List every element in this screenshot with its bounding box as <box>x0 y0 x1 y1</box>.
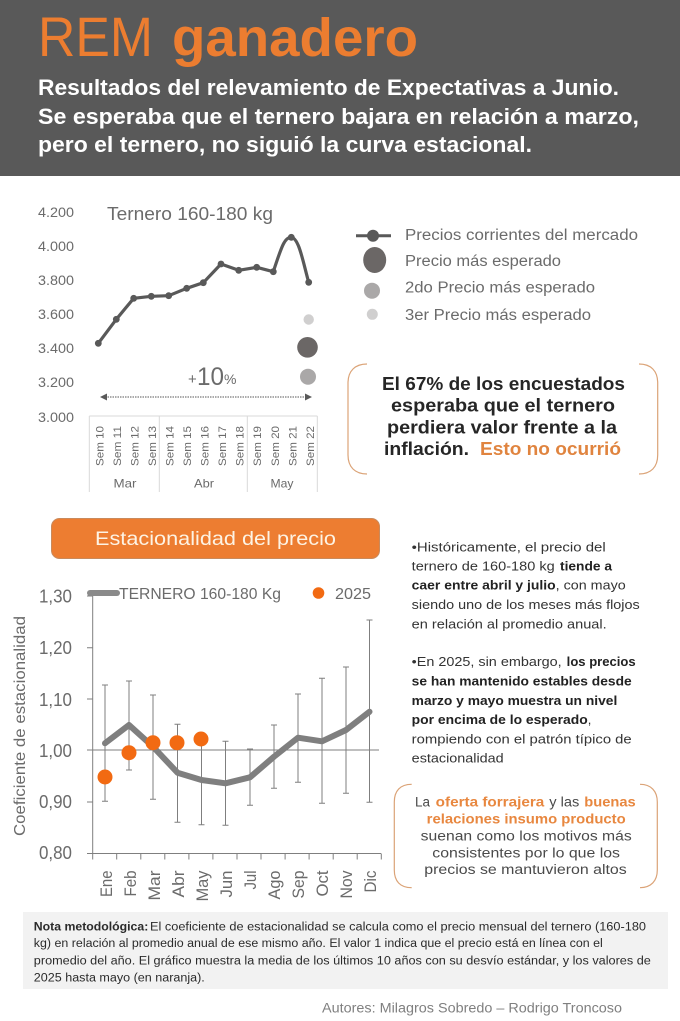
month labels: Dic <box>362 870 380 892</box>
month labels <box>98 870 380 902</box>
callout: reasons: consistentes por lo que los <box>432 845 620 860</box>
error bars <box>102 620 372 825</box>
month labels: Feb <box>122 870 140 896</box>
text block: historical pattern: tiende a <box>560 559 613 574</box>
header banner <box>0 0 680 176</box>
month labels: Mar <box>114 476 136 490</box>
text block: historical pattern: caer entre abril y julio <box>412 578 556 592</box>
y axis labels: 3.400 <box>38 340 74 356</box>
text block: 2025 behaviour: •En 2025, sin embargo, <box>412 654 562 669</box>
legend: market prices: Precios corrientes del mercado <box>405 227 638 244</box>
y axis labels: 1,00 <box>39 741 72 761</box>
text block: historical pattern: en relación al promedio anual. <box>412 616 607 631</box>
text block: 2025 behaviour: marzo y mayo muestra un nivel <box>412 693 617 708</box>
title: ganadero <box>172 8 418 68</box>
week labels: Sem 19 <box>252 426 264 466</box>
authors: Autores: Milagros Sobredo – Rodrigo Troncoso <box>322 1001 622 1016</box>
methodology note: kg) en relación al promedio anual de ese mismo año. El valor 1 indica que el precio está en línea con el <box>34 938 603 950</box>
week labels: Sem 13 <box>147 426 159 466</box>
y axis labels: 1,20 <box>39 638 72 658</box>
legend: second expected <box>364 279 595 299</box>
text block: 2025 behaviour <box>412 654 636 765</box>
change label: 10 <box>197 363 224 391</box>
y axis labels: 3.600 <box>38 306 74 322</box>
subtitle: Se esperaba que el ternero bajara en relación a marzo, <box>38 104 639 129</box>
week labels: Sem 12 <box>129 426 141 466</box>
y axis labels: 3.000 <box>38 409 74 425</box>
text block: 2025 behaviour: los precios <box>567 654 636 669</box>
callout: reasons: relaciones insumo producto <box>427 811 626 826</box>
callout: reasons: suenan como los motivos más <box>421 829 632 844</box>
text block: 2025 behaviour: rompiendo con el patrón típico de <box>412 731 632 746</box>
callout: 67 percent: perdiera valor frente a la <box>387 416 618 437</box>
month labels: Ago <box>266 870 284 900</box>
callout: reasons: La <box>415 795 430 810</box>
section heading: seasonality: Estacionalidad del precio <box>95 528 336 550</box>
legend: third expected: 3er Precio más esperado <box>405 307 591 324</box>
legend: second expected: 2do Precio más esperado <box>405 279 595 296</box>
methodology note: El coeficiente de estacionalidad se calcula como el precio mensual del ternero (160-180 <box>150 922 646 934</box>
month labels: Abr <box>194 476 214 490</box>
change label: % <box>224 371 236 387</box>
line chart: ternero weekly price <box>38 203 318 492</box>
text block: 2025 behaviour: por encima de lo esperado <box>412 712 588 727</box>
callout: 67 percent <box>348 364 658 474</box>
week labels: Sem 15 <box>182 426 194 466</box>
section heading: seasonality <box>52 518 380 558</box>
text block: historical pattern: •Históricamente, el precio del <box>412 540 606 554</box>
month labels: May <box>270 476 294 490</box>
legend: most expected <box>363 247 561 273</box>
methodology note: Nota metodológica: <box>34 922 148 934</box>
chart legend: TERNERO 160-180 Kg <box>119 586 281 603</box>
subtitle <box>38 75 639 157</box>
subtitle: Resultados del relevamiento de Expectativas a Junio. <box>38 75 619 100</box>
price line <box>95 234 312 347</box>
y axis labels: 3.200 <box>38 374 74 390</box>
y axis labels: 4.000 <box>38 238 74 254</box>
expected price bubbles <box>297 314 318 385</box>
chart title: Ternero 160-180 kg <box>107 203 273 224</box>
text block: 2025 behaviour: se han mantenido estables desde <box>412 673 632 688</box>
seasonality chart <box>12 586 381 902</box>
axes <box>87 596 381 860</box>
callout: reasons: buenas <box>584 795 636 810</box>
2025 points <box>98 732 208 784</box>
legend: most expected: Precio más esperado <box>405 253 561 270</box>
methodology note <box>23 912 668 989</box>
y axis labels: 3.800 <box>38 272 74 288</box>
y axis labels: 0,80 <box>39 843 72 863</box>
title <box>38 5 418 68</box>
y axis labels: 1,30 <box>39 586 72 606</box>
text block: historical pattern: ternero de 160-180 kg <box>412 559 555 574</box>
month labels: Jun <box>218 870 236 898</box>
month labels: Nov <box>338 870 356 898</box>
month labels: May <box>194 870 212 902</box>
callout: reasons: oferta forrajera <box>436 795 545 810</box>
week labels: Sem 22 <box>305 426 317 466</box>
y axis labels: 0,90 <box>39 792 72 812</box>
callout: 67 percent: inflación. <box>384 438 469 459</box>
legend: price chart <box>356 227 638 324</box>
change label <box>188 363 236 391</box>
month labels <box>114 476 294 490</box>
text block: historical pattern: , con mayo <box>556 578 626 592</box>
mean seasonal line <box>105 712 370 783</box>
subtitle: pero el ternero, no siguió la curva estacional. <box>38 132 532 157</box>
month labels: Sep <box>290 870 308 898</box>
week labels: Sem 11 <box>112 426 124 466</box>
week labels <box>94 426 317 466</box>
methodology note: 2025 hasta mayo (en naranja). <box>34 972 205 984</box>
range arrow <box>100 394 312 400</box>
y axis labels <box>38 204 74 425</box>
week labels: Sem 20 <box>270 426 282 466</box>
text block: 2025 behaviour: , <box>588 712 591 727</box>
text block: historical pattern <box>412 540 640 631</box>
callout: 67 percent: esperaba que el ternero <box>391 395 615 416</box>
text block: historical pattern: siendo uno de los meses más flojos <box>412 597 640 612</box>
chart legend <box>90 586 371 603</box>
methodology note: promedio del año. El gráfico muestra la media de los últimos 10 años con su desvío estándar, y los valores de <box>34 956 651 968</box>
chart legend: 2025 <box>335 586 371 603</box>
callout: reasons <box>394 784 657 888</box>
x axis table <box>89 416 317 492</box>
change label: + <box>188 371 197 388</box>
title: REM <box>38 5 153 68</box>
week labels: Sem 21 <box>287 426 299 466</box>
week labels: Sem 17 <box>217 426 229 466</box>
y axis labels <box>39 586 72 863</box>
week labels: Sem 18 <box>235 426 247 466</box>
callout: reasons: y las <box>549 795 580 810</box>
week labels: Sem 14 <box>164 426 176 466</box>
month labels: Ene <box>98 870 116 897</box>
month labels: Jul <box>242 870 260 890</box>
month labels: Mar <box>146 870 164 901</box>
month labels: Abr <box>170 870 188 898</box>
week labels: Sem 10 <box>94 426 106 466</box>
callout: reasons: precios se mantuvieron altos <box>424 862 627 877</box>
callout: 67 percent: Esto no ocurrió <box>480 438 621 459</box>
text block: 2025 behaviour: estacionalidad <box>412 750 504 765</box>
y axis title: Coeficiente de estacionalidad <box>12 616 29 836</box>
y axis labels: 1,10 <box>39 690 72 710</box>
week labels: Sem 16 <box>200 426 212 466</box>
y axis labels: 4.200 <box>38 204 74 220</box>
month labels: Oct <box>314 870 332 896</box>
callout: 67 percent: El 67% de los encuestados <box>382 373 625 394</box>
